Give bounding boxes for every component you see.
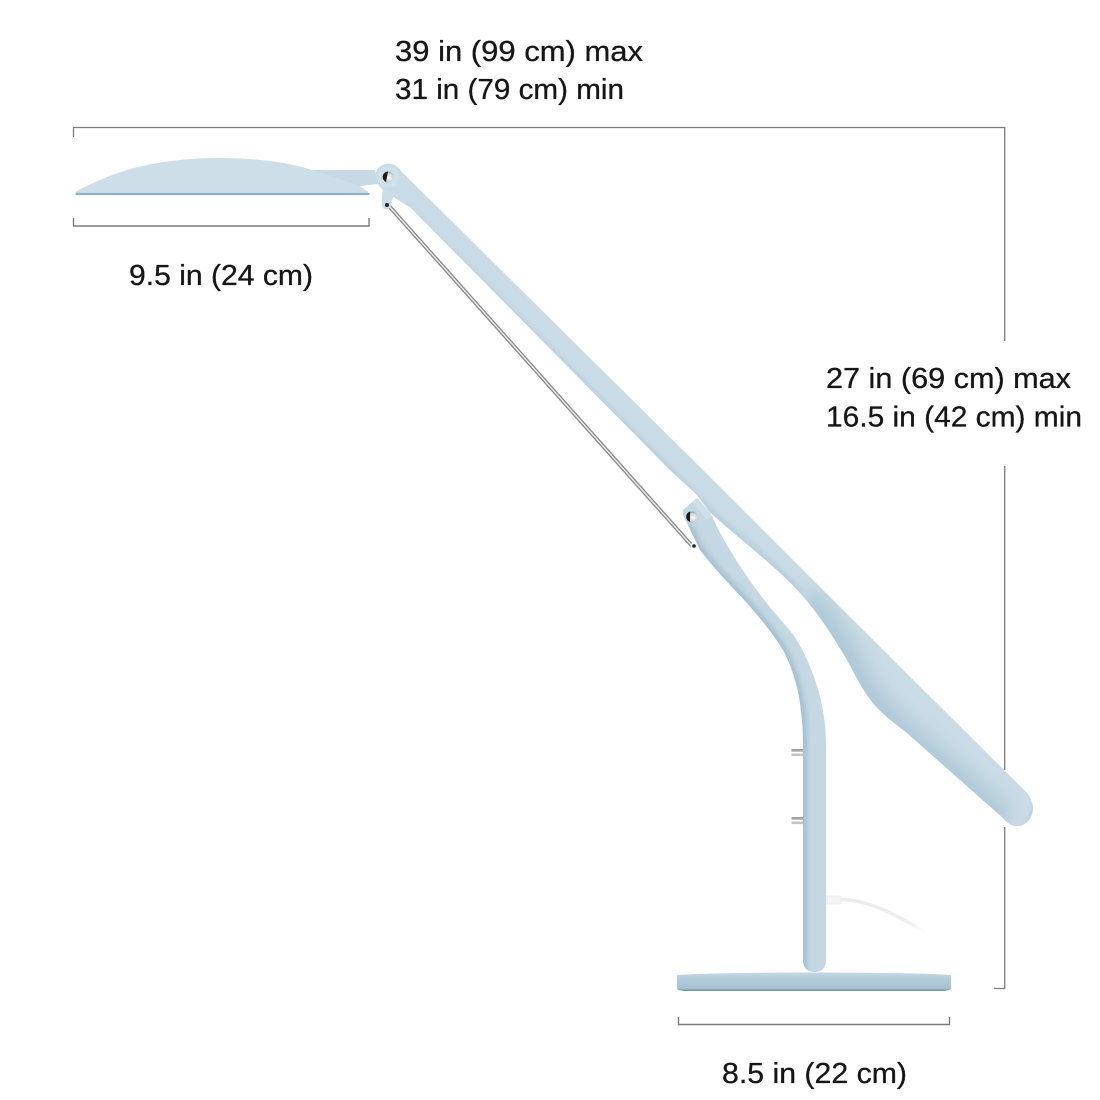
label: height bbox=[826, 363, 1082, 434]
upper joint with bolt bbox=[377, 166, 399, 209]
lower joint with bolt bbox=[686, 512, 698, 550]
label: overall width bbox=[395, 36, 644, 106]
label: height: 27 in (69 cm) max bbox=[826, 363, 1072, 395]
power cable bbox=[826, 896, 925, 932]
label: overall width: 39 in (99 cm) max bbox=[395, 36, 644, 68]
lamp illustration bbox=[76, 150, 1050, 991]
dimension bracket: shade width bbox=[74, 218, 369, 226]
height adjustment pins bbox=[792, 749, 804, 824]
label: overall width: 31 in (79 cm) min bbox=[395, 74, 624, 106]
upper arm with handle bbox=[360, 150, 1050, 840]
label: height: 16.5 in (42 cm) min bbox=[826, 402, 1082, 434]
support rod bbox=[389, 206, 693, 547]
dimension bracket: base width bbox=[678, 1017, 950, 1024]
dimension line: overall width and height bbox=[74, 128, 1005, 988]
lower arm and column bbox=[682, 498, 826, 972]
base bbox=[677, 972, 951, 991]
label: base width: 8.5 in (22 cm) bbox=[722, 1058, 907, 1090]
label: shade width: 9.5 in (24 cm) bbox=[129, 260, 313, 292]
shade bbox=[76, 158, 378, 195]
